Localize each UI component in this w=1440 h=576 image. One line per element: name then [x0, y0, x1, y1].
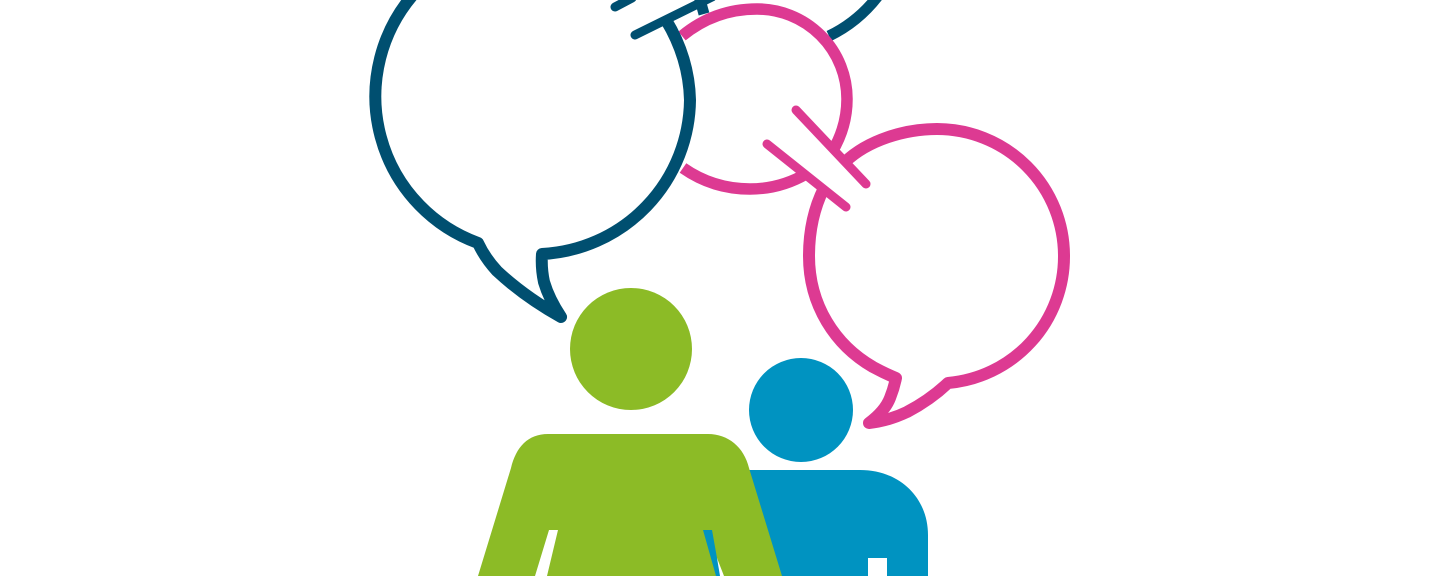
blue figure head: [749, 358, 853, 462]
white gap beside green figure arm: [717, 558, 725, 576]
green figure head: [570, 288, 692, 410]
blue figure body: [700, 470, 928, 576]
connector bars between pink bubbles: [767, 110, 866, 207]
speech bubble: top right fragment (dark blue): [699, 0, 878, 36]
green figure body: [478, 434, 782, 576]
person: blue figure: [700, 358, 928, 576]
person: green figure: [478, 288, 782, 576]
connector bars at top of dark bubble: [635, 0, 712, 35]
speech bubble: large dark blue, from green person: [375, 0, 712, 317]
speech bubble: small pink circle: [682, 9, 847, 189]
speech bubble: large pink, from blue person: [809, 129, 1064, 423]
